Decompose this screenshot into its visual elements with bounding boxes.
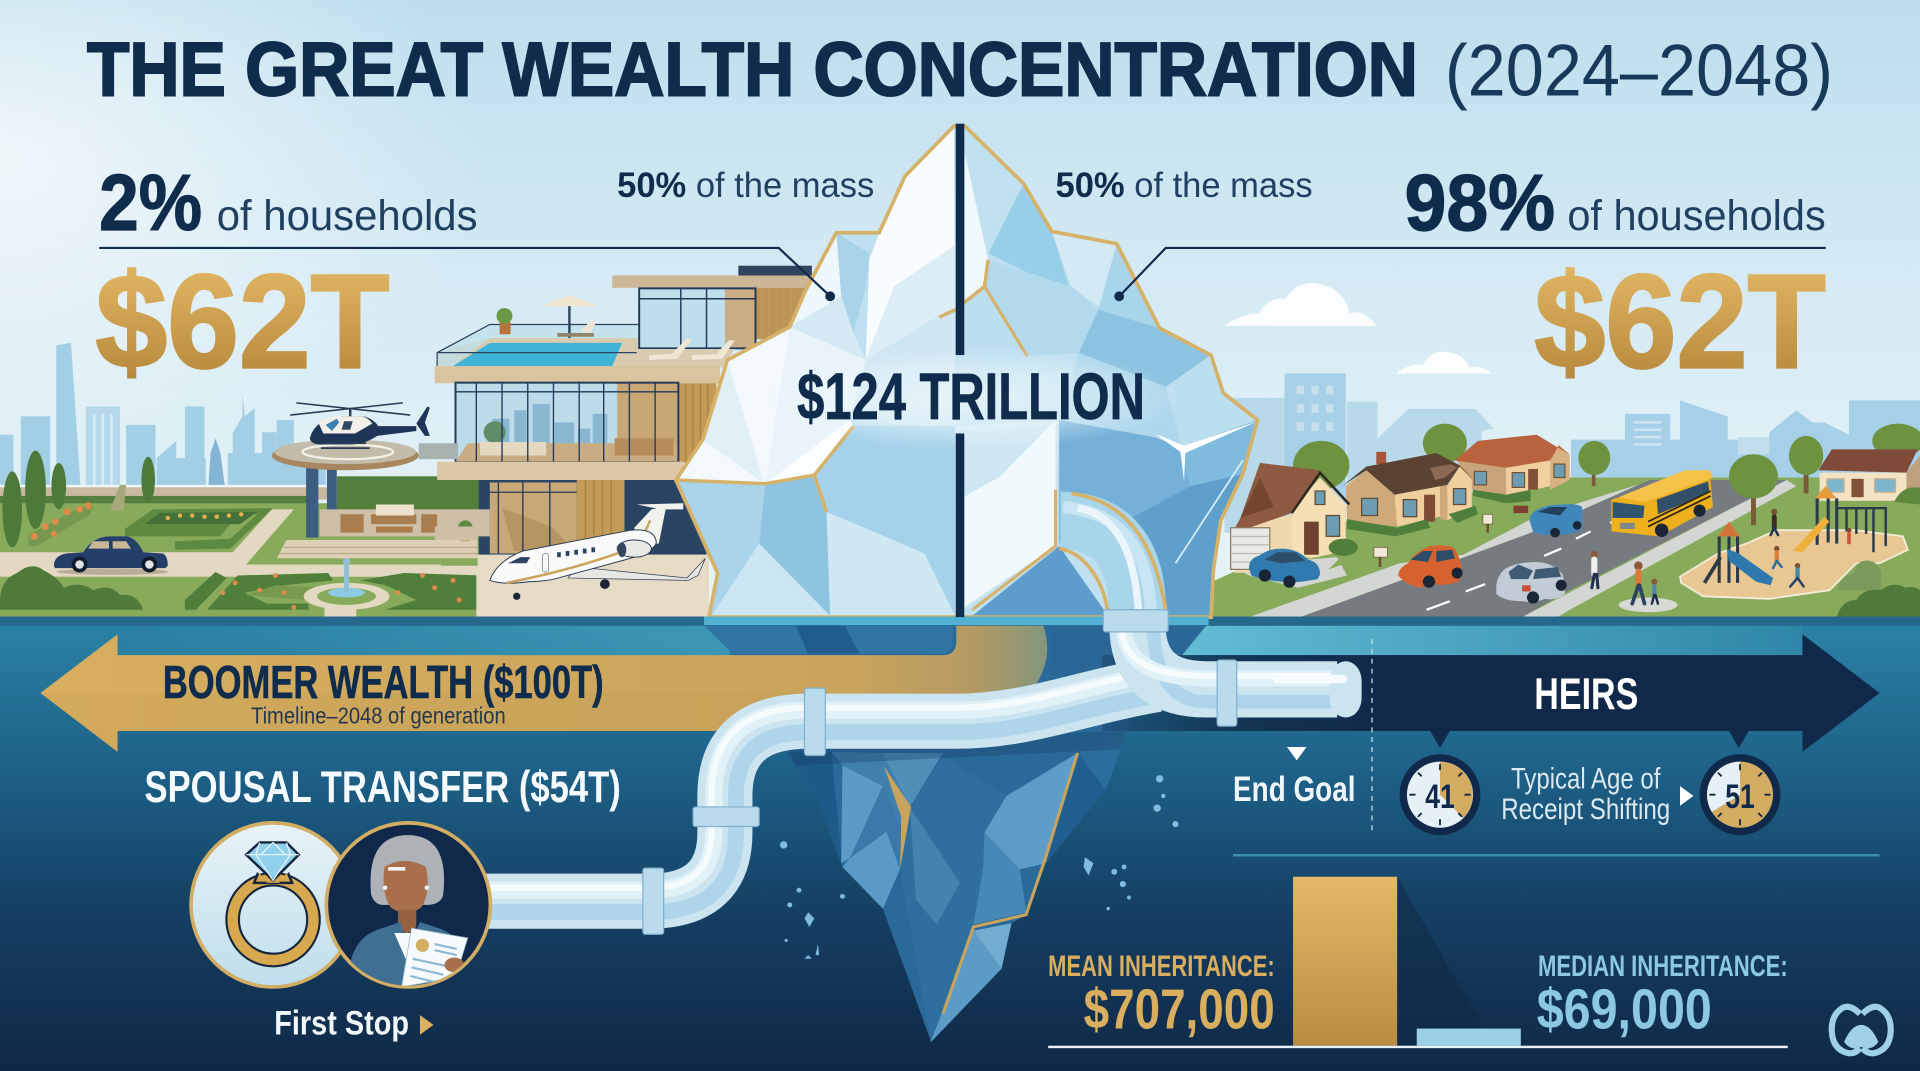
terrace with pool: [437, 324, 735, 367]
left leader line: [99, 248, 835, 301]
boomer wealth label: BOOMER WEALTH ($100T): [163, 656, 604, 708]
right mass label: 50% of the mass: [1056, 165, 1313, 205]
ice chips: [780, 775, 1179, 959]
median inheritance label: MEDIAN INHERITANCE:: [1538, 950, 1788, 983]
mean inheritance label: [1048, 950, 1275, 1041]
underwater iceberg: [704, 626, 1206, 1042]
typical age caption: Receipt Shifting: [1501, 793, 1670, 826]
fountain: [304, 556, 389, 610]
playground: [1680, 486, 1920, 617]
ground storey: [479, 480, 707, 555]
right lawn: [1212, 478, 1920, 617]
end goal label: [1233, 747, 1356, 809]
blue far car: [1529, 504, 1582, 538]
right stat: 98% of households: [1404, 158, 1826, 247]
clock: age 41: 41: [1425, 778, 1455, 816]
first stop label: First Stop: [274, 1005, 409, 1043]
typical age caption: Typical Age of: [1511, 763, 1661, 796]
mean inheritance label: $707,000: [1084, 978, 1275, 1041]
road and sidewalks: [1233, 480, 1796, 617]
left value $62T: $62T: [96, 247, 389, 396]
right neighbourhood background buildings: [1224, 373, 1920, 533]
teal band right of pipe: [1176, 626, 1802, 655]
school bus: [1611, 470, 1713, 537]
yard signs: [1374, 506, 1528, 567]
section divider: [1233, 854, 1880, 857]
upper storey: [612, 266, 814, 348]
underwater sea: [0, 618, 1920, 1071]
patio furniture: [277, 504, 490, 558]
right stat: 98% of households: of households: [1567, 192, 1826, 240]
spousal pipe: [484, 671, 1157, 912]
median inheritance label: $69,000: [1537, 978, 1712, 1041]
left stat: 2% of households: of households: [217, 192, 478, 240]
cypress trees: [2, 451, 155, 547]
umbrella and plant: [497, 295, 599, 338]
bar chart: mean vs median inheritance: [1048, 877, 1788, 1048]
blue parked car: [1249, 549, 1320, 588]
mean inheritance label: MEAN INHERITANCE:: [1048, 950, 1275, 983]
sky background: [0, 0, 1920, 624]
house 1: [1231, 463, 1358, 573]
iceberg divider: [956, 124, 964, 617]
helipad and helicopter: [272, 403, 458, 538]
title: (2024–2048): [1445, 29, 1833, 112]
left mass label: 50% of the mass: [617, 165, 874, 205]
iceberg total label: $124 TRILLION: [797, 360, 1145, 434]
gold timeline arrow: boomer wealth: [40, 626, 1047, 752]
garden paths: [0, 509, 484, 617]
right stat: 98% of households: 98%: [1404, 158, 1555, 247]
pipe inside iceberg: [1059, 493, 1167, 617]
dashed divider: [1371, 639, 1373, 835]
clouds: [1224, 283, 1491, 373]
title: THE GREAT WEALTH CONCENTRATION: [87, 28, 1418, 113]
far right house: [1818, 449, 1920, 504]
suburban houses: [1231, 435, 1920, 573]
swing frame: [1837, 508, 1887, 552]
left stat: 2% of households: 2%: [99, 158, 202, 247]
silver car: [1496, 562, 1567, 604]
pedestrians: [1591, 551, 1678, 612]
navy timeline arrow: heirs: [1102, 634, 1880, 752]
boomer wealth label: [163, 656, 604, 729]
children: [1771, 509, 1851, 587]
icon: wedding ring: [191, 823, 355, 987]
bushes: [1837, 560, 1920, 617]
spousal transfer heading: SPOUSAL TRANSFER ($54T): [144, 763, 621, 812]
icon: woman with document: [326, 823, 490, 988]
private jet: [490, 503, 705, 600]
pipe flanges: [643, 610, 1237, 934]
clock: age 51: 51: [1725, 778, 1755, 816]
garden hedges and flowers: [0, 485, 484, 610]
mansion: [435, 266, 814, 617]
median inheritance label: [1537, 950, 1788, 1041]
right leader line: [1114, 248, 1826, 301]
clock: age 51: [1700, 731, 1780, 835]
boomer wealth label: Timeline–2048 of generation: [251, 703, 506, 729]
iceberg total label halo: [753, 347, 1182, 449]
middle glass storey: [456, 383, 716, 463]
waterline: [0, 617, 1920, 626]
orange car: [1398, 545, 1463, 588]
heirs label: HEIRS: [1534, 670, 1638, 719]
garden wall and lawn: [0, 476, 490, 617]
blue slide tower: [1704, 522, 1773, 585]
logo icon: [1832, 1007, 1891, 1053]
classic car: [54, 536, 169, 575]
end goal label: End Goal: [1233, 769, 1356, 809]
house 3: [1455, 435, 1571, 503]
yellow slide tower: [1793, 486, 1837, 552]
left stat: 2% of households: [99, 158, 478, 247]
left city skyline: [0, 343, 326, 492]
clock: age 41: [1400, 731, 1480, 835]
light band above arrow: [118, 626, 730, 655]
heirs pipe: [1122, 616, 1362, 718]
right value $62T: $62T: [1534, 247, 1826, 396]
street trees: [1293, 424, 1920, 525]
iceberg above water: [676, 126, 1258, 617]
house 2: [1342, 452, 1478, 536]
street cars: [1249, 504, 1582, 604]
typical age caption: [1501, 763, 1693, 826]
bright waterline across iceberg: [704, 617, 1209, 625]
